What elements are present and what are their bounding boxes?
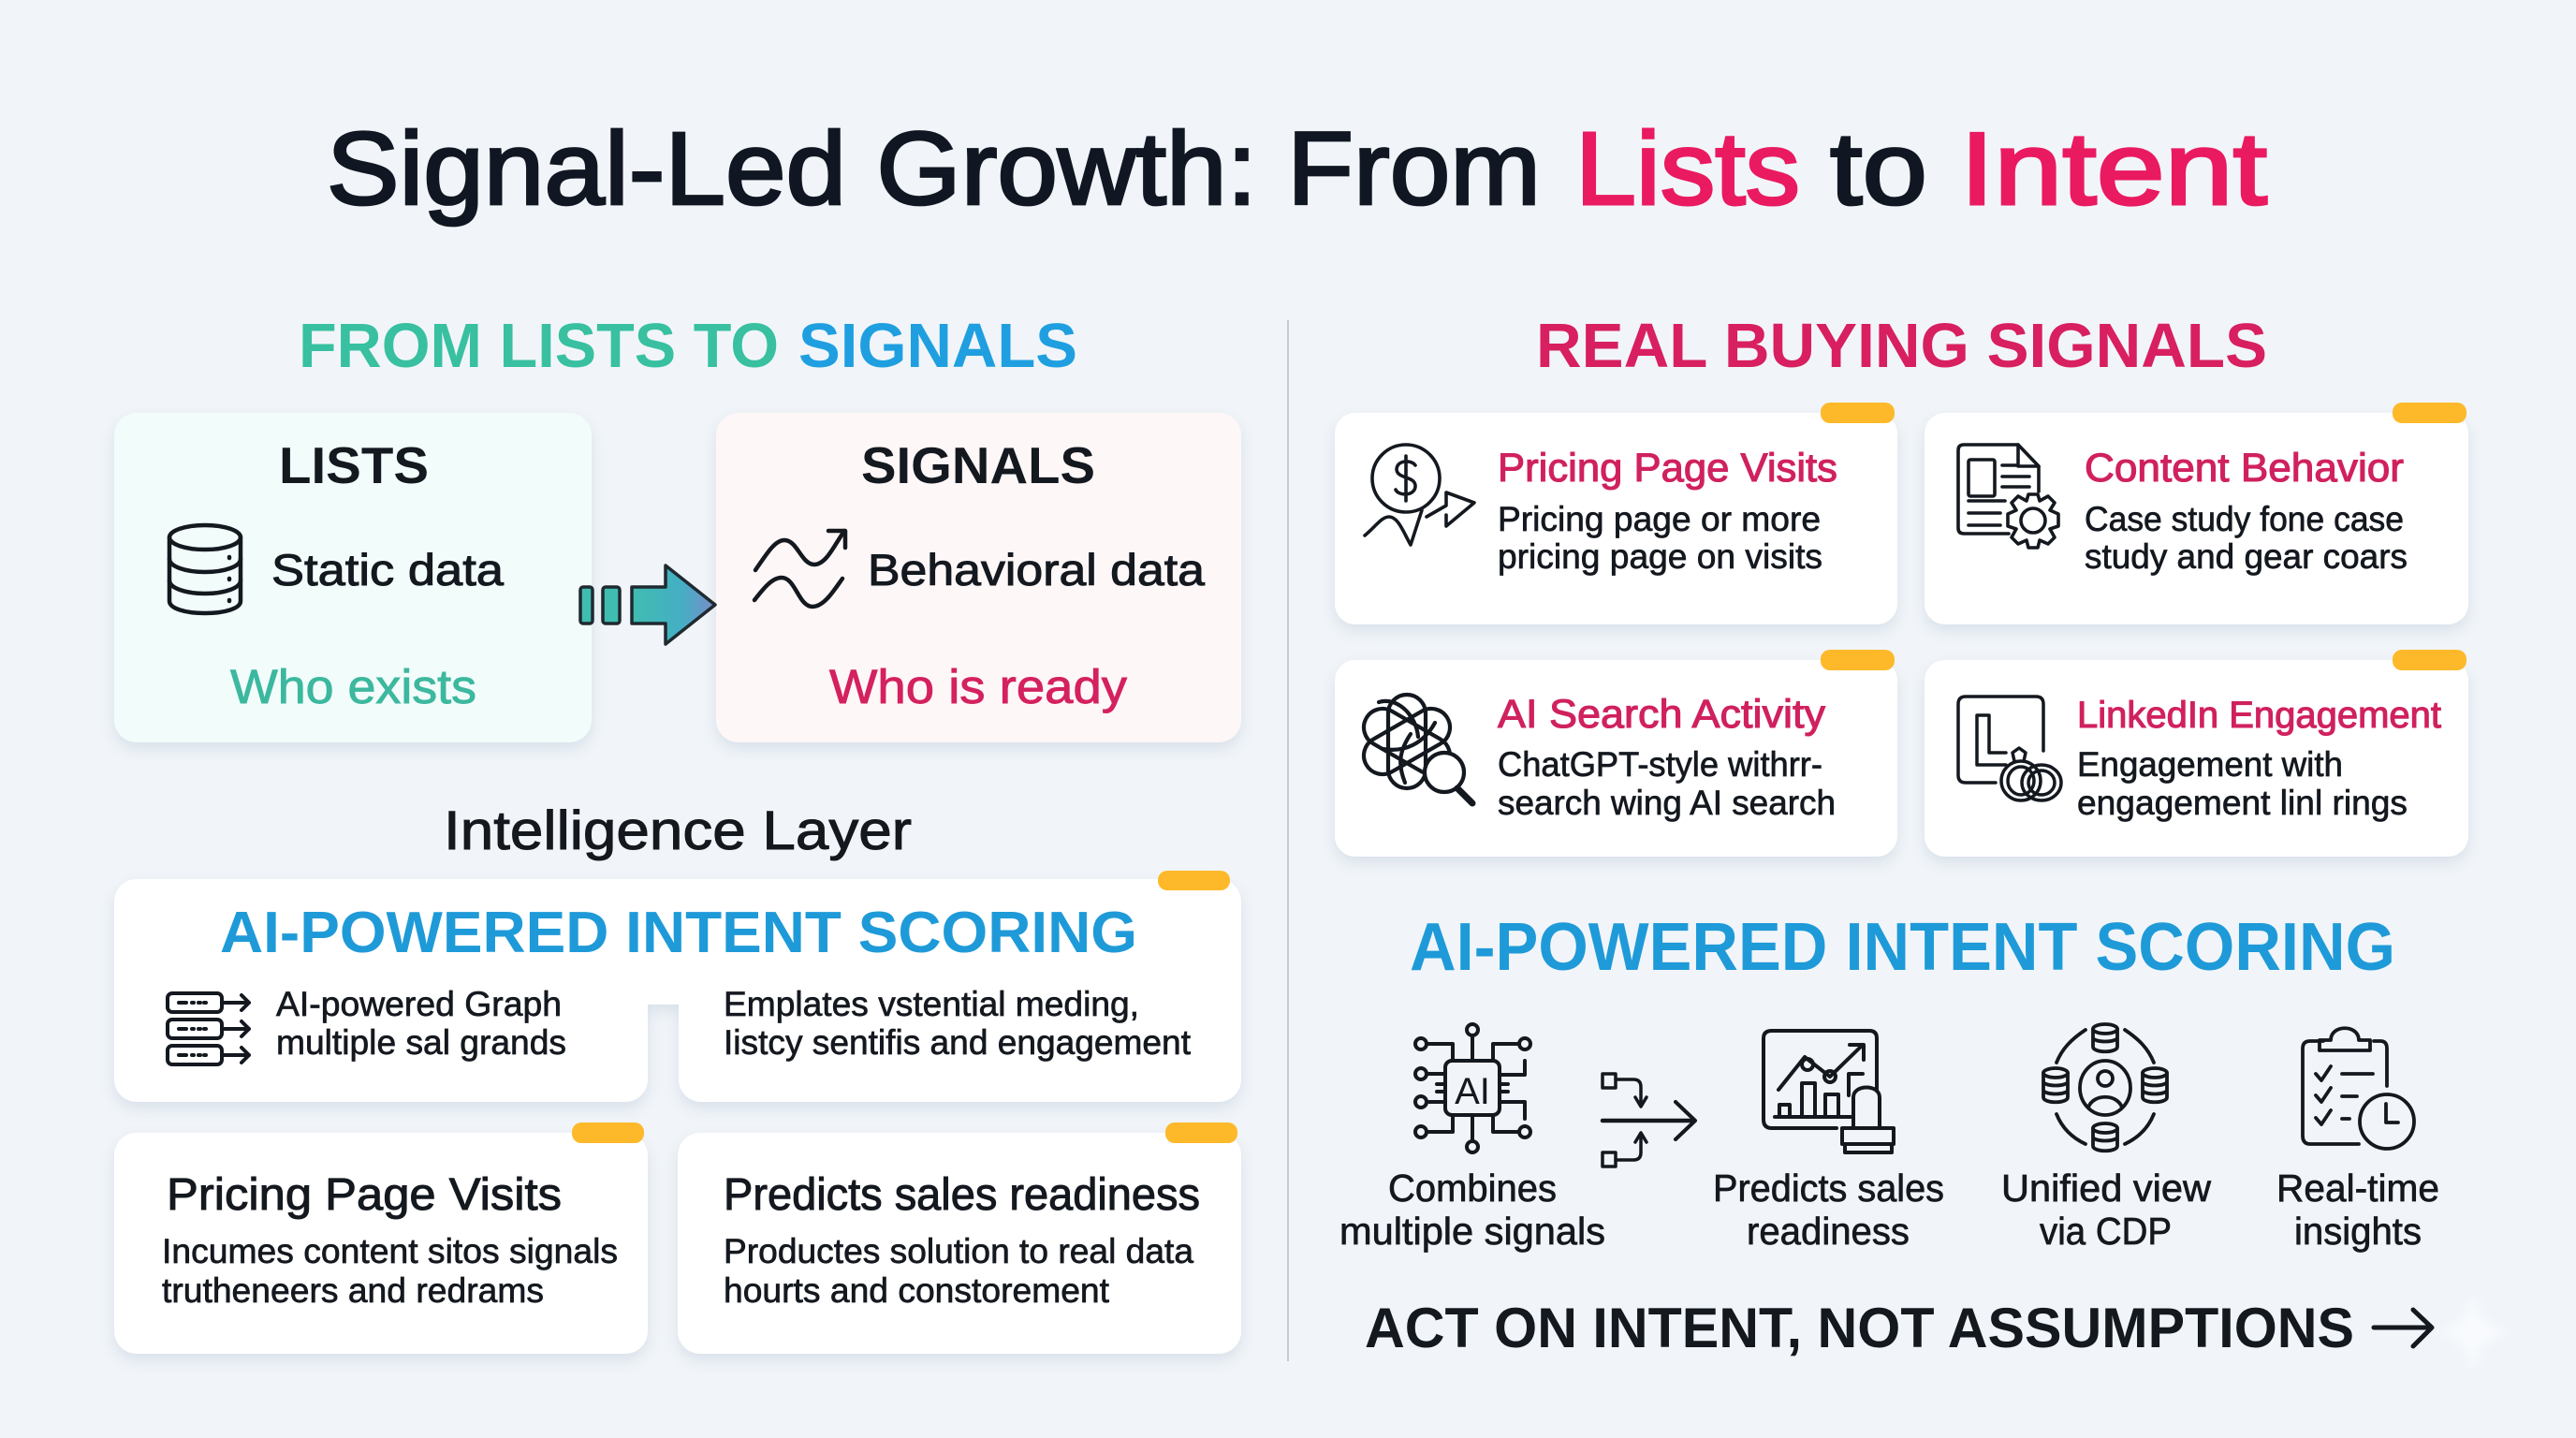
body: search wing AI search: [1498, 784, 1836, 822]
heading: Predicts sales readiness: [724, 1170, 1200, 1220]
label: predicts sales readiness: [1713, 1167, 1944, 1253]
body: trutheneers and redrams: [162, 1271, 544, 1310]
tab: [2393, 403, 2466, 423]
title: [327, 111, 2267, 227]
panel: lists: [114, 413, 592, 742]
body: [1498, 745, 1836, 822]
label: real-time insights: Real-time: [2276, 1167, 2439, 1210]
tab: [572, 1123, 644, 1143]
text left: multiple sal grands: [276, 1023, 566, 1062]
tab: [1821, 650, 1895, 670]
who exists: Who exists: [230, 660, 476, 713]
text left: [276, 985, 566, 1062]
body: [724, 1232, 1193, 1310]
who is ready: Who is ready: [829, 660, 1128, 713]
body: Productes solution to real data: [724, 1232, 1193, 1270]
tab: [1158, 871, 1230, 890]
body: ChatGPT-style withrr-: [1498, 745, 1822, 784]
body: Case study fone case: [2085, 500, 2404, 538]
text right: Emplates vstential meding,: [724, 985, 1139, 1023]
icon: database: [169, 525, 241, 613]
arrow: call to action: [2374, 1310, 2432, 1346]
tab: [1165, 1123, 1237, 1143]
heading: from lists to signals: [299, 311, 1077, 381]
label: unified view via cdp: via CDP: [2040, 1210, 2172, 1253]
heading: Pricing Page Visits: [1498, 446, 1837, 491]
icon: ai chip: AI: [1455, 1071, 1490, 1112]
label: combines multiple signals: multiple signals: [1339, 1210, 1605, 1253]
heading: real buying signals: REAL BUYING SIGNALS: [1536, 311, 2267, 381]
card: ai search activity: [1335, 650, 1897, 857]
heading: Pricing Page Visits: [167, 1170, 562, 1220]
title: Intent: [1960, 111, 2267, 227]
card: linkedin engagement: [1925, 650, 2468, 857]
label: predicts sales readiness: readiness: [1747, 1210, 1910, 1253]
body: Pricing page or more: [1498, 500, 1821, 538]
icon: chart and stamp: [1764, 1031, 1894, 1152]
body: Incumes content sitos signals: [162, 1232, 618, 1270]
arrow: merge signals: [1603, 1074, 1695, 1167]
signals heading: SIGNALS: [861, 436, 1095, 494]
body: [162, 1232, 618, 1310]
panel: ai-powered intent scoring card: [114, 871, 1241, 1102]
icon: signal waves: [754, 531, 845, 607]
heading: AI Search Activity: [1498, 692, 1826, 737]
label: combines multiple signals: [1339, 1167, 1605, 1253]
lists heading: LISTS: [279, 436, 429, 494]
static data label: Static data: [271, 545, 505, 594]
icon: document and gear: [1958, 445, 2058, 548]
panel: signals: [716, 413, 1241, 742]
body: [2077, 745, 2408, 822]
label: unified view via cdp: Unified view: [2001, 1167, 2211, 1210]
heading: from lists to signals: FROM LISTS TO: [299, 311, 779, 381]
body: [2085, 500, 2408, 576]
title: to: [1830, 111, 1927, 227]
label: predicts sales readiness: Predicts sales: [1713, 1167, 1944, 1210]
text right: [724, 985, 1192, 1062]
card: content behavior: [1925, 403, 2468, 624]
label: combines multiple signals: Combines: [1388, 1167, 1557, 1210]
text left: AI-powered Graph: [276, 985, 562, 1023]
center divider: [1287, 320, 1289, 1361]
title: Signal-Led Growth: From: [327, 111, 1541, 227]
tab: [1821, 403, 1895, 423]
intelligence layer heading: Intelligence Layer: [444, 800, 912, 861]
title: Lists: [1575, 111, 1800, 227]
text right: Iistcy sentifis and engagement: [724, 1023, 1192, 1062]
card: predicts sales readiness: [678, 1123, 1241, 1354]
body: hourts and constorement: [724, 1271, 1110, 1310]
icon: pricing: [1365, 445, 1474, 545]
icon: faint sparkle: [2436, 1290, 2510, 1374]
heading: from lists to signals: SIGNALS: [798, 311, 1077, 381]
card heading: AI-POWERED INTENT SCORING: [220, 901, 1137, 965]
body: study and gear coars: [2085, 537, 2408, 576]
tab: [2393, 650, 2466, 670]
label: real-time insights: [2276, 1167, 2439, 1253]
call to action: ACT ON INTENT, NOT ASSUMPTIONS: [1365, 1297, 2354, 1359]
arrow: lists to signals: [580, 565, 715, 644]
label: real-time insights: insights: [2294, 1210, 2422, 1253]
card: pricing page visits signal: [1335, 403, 1897, 624]
icon: L square with rings: [1958, 697, 2061, 800]
body: Engagement with: [2077, 745, 2343, 784]
icon: clipboard and clock: [2303, 1028, 2414, 1149]
card: pricing page visits: [114, 1123, 648, 1354]
body: [1498, 500, 1822, 576]
body: pricing page on visits: [1498, 537, 1822, 576]
heading: ai-powered intent scoring: AI-POWERED INTENT SCORING: [1410, 910, 2395, 985]
icon: signal stack: [168, 993, 249, 1064]
icon: knot and magnifier: [1357, 695, 1472, 803]
heading: Content Behavior: [2085, 446, 2404, 491]
label: unified view via cdp: [2001, 1167, 2211, 1253]
icon: ai chip: [1415, 1024, 1530, 1152]
behavioral data label: Behavioral data: [868, 545, 1206, 594]
heading: LinkedIn Engagement: [2077, 695, 2441, 736]
body: engagement linl rings: [2077, 784, 2408, 822]
icon: unified customer data: [2043, 1024, 2167, 1151]
